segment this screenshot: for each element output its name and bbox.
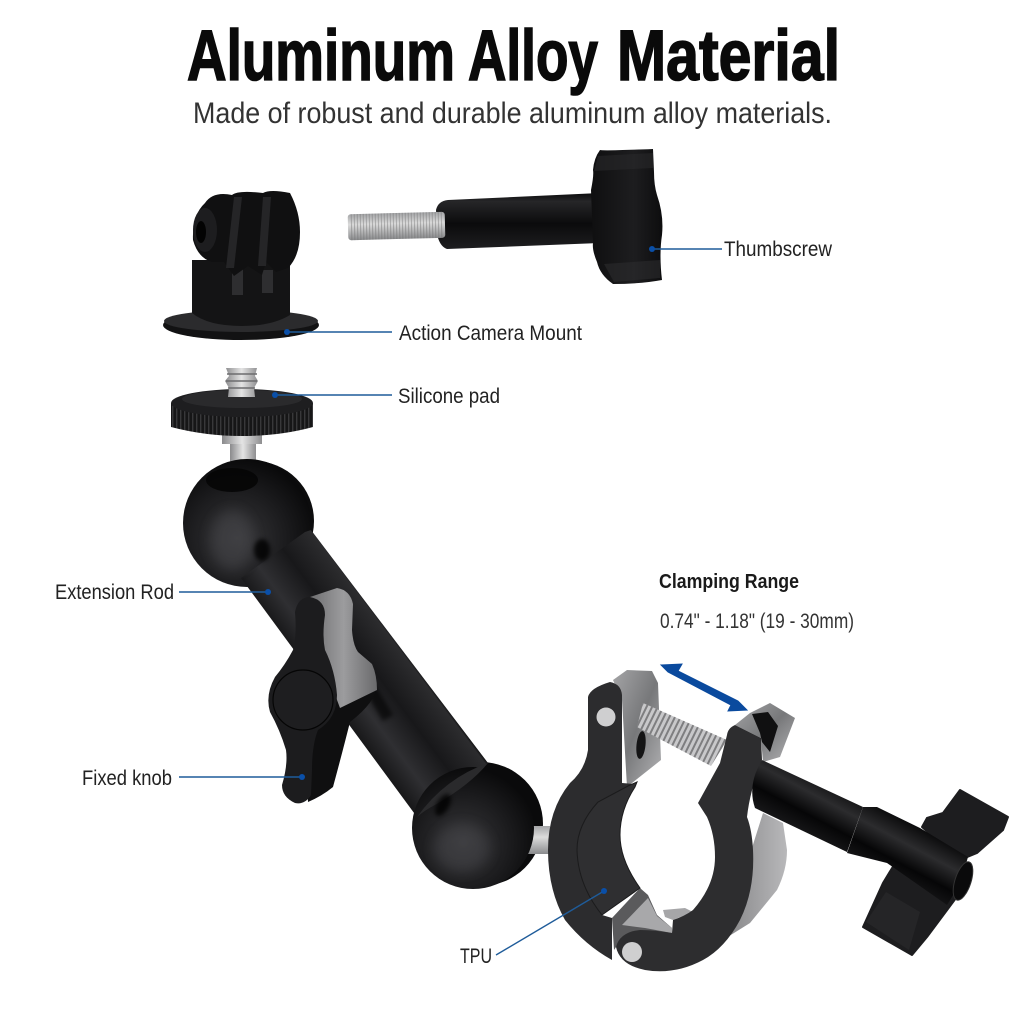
title: Material: [617, 17, 840, 96]
callout: action camera mount: [284, 322, 582, 345]
dimension arrow: [661, 664, 747, 711]
callout: silicone pad: Silicone pad: [398, 385, 500, 408]
title: Aluminum: [187, 17, 455, 96]
callout: TPU: TPU: [460, 945, 492, 968]
part: action camera mount: [163, 191, 319, 340]
title: [187, 17, 840, 96]
callout: thumbscrew: Thumbscrew: [724, 238, 833, 261]
clamping range heading: Clamping Range: [659, 571, 799, 593]
title: Alloy: [468, 17, 598, 96]
part: fixed knob: [268, 588, 377, 803]
clamping range value: 0.74" - 1.18" (19 - 30mm): [660, 610, 854, 633]
callout: fixed knob: [82, 767, 305, 790]
callout: fixed knob: Fixed knob: [82, 767, 172, 790]
callout: extension rod: [55, 581, 271, 604]
callout: silicone pad: [272, 385, 500, 408]
part: clamp: [548, 670, 795, 971]
part: silicone pad screw: [171, 368, 313, 471]
part: extension rod with ball joints: [183, 459, 550, 889]
callout: action camera mount: Action Camera Mount: [399, 322, 582, 345]
callout: extension rod: Extension Rod: [55, 581, 174, 604]
part: thumbscrew: [348, 149, 662, 284]
subtitle: Made of robust and durable aluminum alloy materials.: [193, 97, 832, 130]
part: clamp shaft and wing knob: [752, 760, 1008, 955]
callout: TPU: [460, 888, 607, 968]
callout: thumbscrew: [649, 238, 833, 261]
